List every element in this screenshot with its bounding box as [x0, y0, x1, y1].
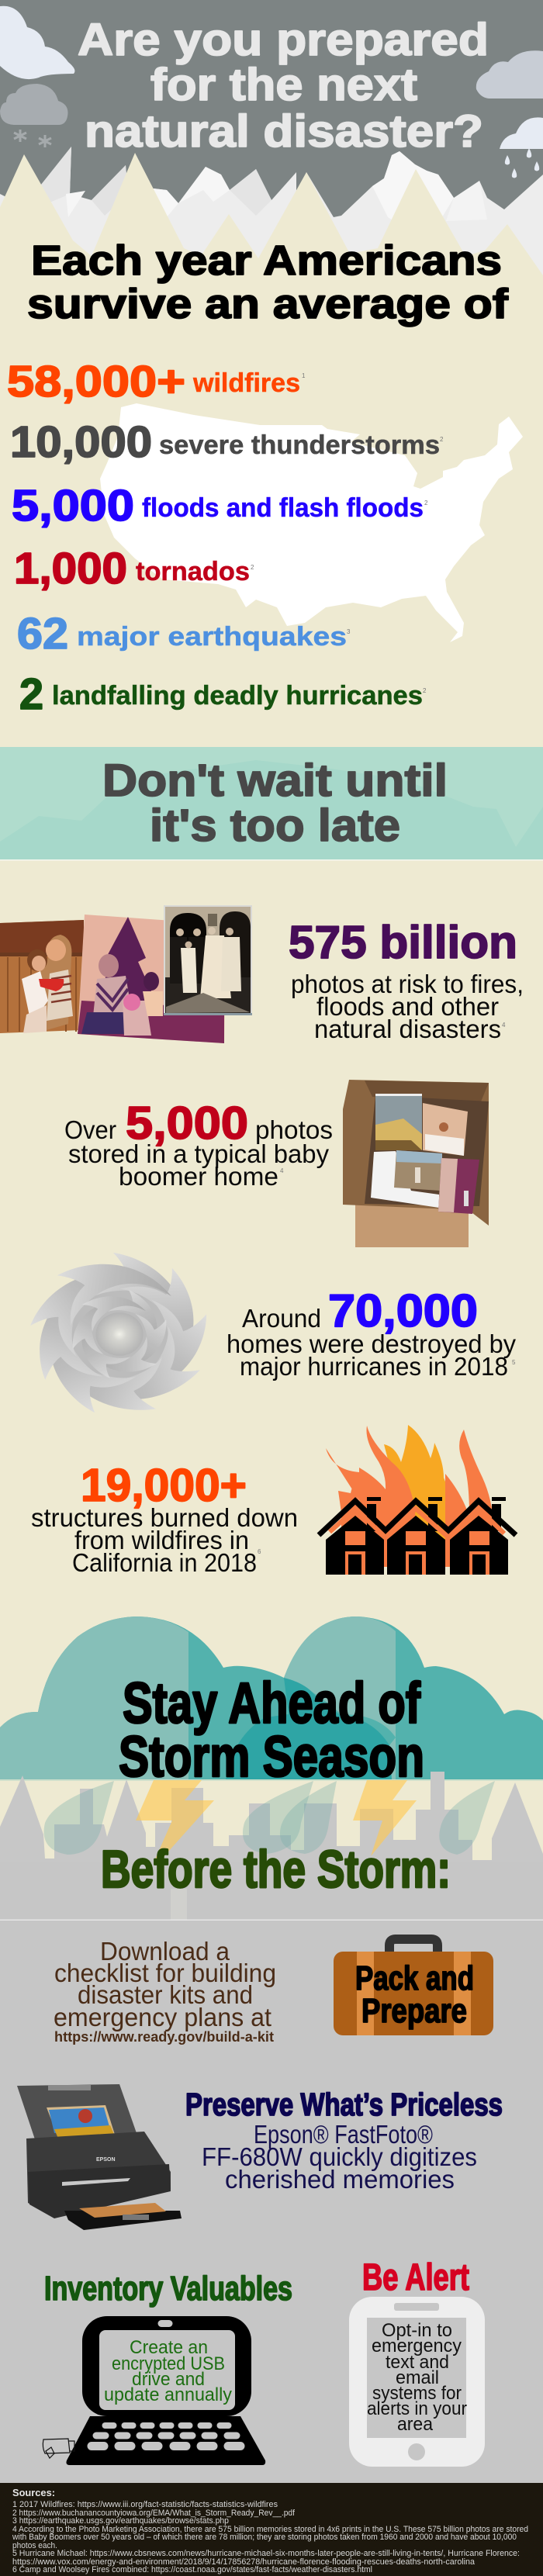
icon: hurricane swirl — [9, 1233, 228, 1432]
text: preserve what's priceless: Epson® FastFoto® — [254, 2120, 433, 2149]
laptop screen text: update annually — [104, 2384, 232, 2405]
stat: 19,000+ structures: 6 — [258, 1548, 261, 1555]
stat: earthquakes: 3 — [347, 628, 351, 635]
phone screen text: text and — [386, 2352, 449, 2373]
header sky — [0, 0, 543, 233]
stat: wildfires: wildfires — [192, 368, 300, 398]
sources list: 3 https://earthquake.usgs.gov/earthquakes/browse/stats.php — [12, 2516, 229, 2526]
laptop screen text: encrypted USB — [112, 2353, 225, 2374]
stat: thunderstorms: severe thunderstorms — [159, 430, 440, 460]
photo: purple print — [438, 1158, 479, 1214]
sources list: 5 Hurricane Michael: https://www.cbsnews.com/news/hurricane-michael-six-months-later-people-are-still-living-in-tents/, Hurricane Florence: — [12, 2549, 520, 2558]
stat: floods: floods and flash floods — [142, 493, 424, 523]
stat: tornados: 2 — [251, 564, 254, 571]
heading: each year Americans: Each year Americans — [31, 237, 502, 284]
icon: rain cloud — [500, 117, 543, 178]
stat: 575 billion photos: photos at risk to fires, — [291, 970, 524, 998]
title: for the next — [150, 60, 417, 110]
sources list: 2 https://www.buchanancountyiowa.org/EMA/What_is_Storm_Ready_Rev__.pdf — [12, 2509, 296, 2518]
icon: smartphone — [349, 2297, 485, 2467]
stat: hurricanes: 2 — [423, 687, 427, 694]
stat: 5,000 photos — [64, 1098, 333, 1191]
lightning bolts — [136, 1780, 417, 1873]
stat: 575 billion photos: 4 — [502, 1022, 506, 1029]
stat: 575 billion photos — [289, 917, 524, 1043]
sources list: photos each. — [12, 2541, 57, 2550]
text: preserve what's priceless: FF-680W quickly digitizes — [202, 2142, 477, 2171]
icon: grey cloud right — [476, 50, 543, 99]
phone screen text: systems for — [372, 2383, 462, 2404]
phone screen text: email — [396, 2367, 439, 2388]
stat: 5,000 photos: stored in a typical baby — [68, 1139, 329, 1168]
chimneys — [367, 1497, 506, 1531]
suitcase label: Pack and — [355, 1959, 474, 1997]
panel: preparation steps — [0, 1862, 543, 2483]
text: checklist: checklist for building — [54, 1959, 276, 1987]
icon: snow cloud — [0, 84, 68, 147]
stat: 19,000+ structures: California in 2018 — [72, 1548, 257, 1577]
suitcase label: Prepare — [361, 1992, 467, 2030]
panel: storm city — [0, 1772, 543, 1924]
flames — [326, 1425, 500, 1567]
stat: hurricanes: 2 — [19, 669, 43, 719]
stat: 575 billion photos: 575 billion — [289, 917, 517, 968]
snowy mountains — [0, 147, 543, 310]
photo: white print — [371, 1151, 439, 1208]
stat: 5,000 photos: 4 — [280, 1167, 284, 1174]
text: preserve what's priceless — [185, 2087, 503, 2194]
image: cardboard box of photos — [343, 1080, 489, 1247]
stat: hurricanes — [19, 669, 427, 719]
heading: be alert: Be Alert — [362, 2257, 469, 2298]
stat: hurricanes: landfalling deadly hurricanes — [52, 681, 423, 711]
stat: wildfires: 58,000+ — [7, 357, 185, 406]
stat: wildfires: 1 — [302, 372, 306, 379]
stat: 70,000 homes — [227, 1285, 516, 1381]
text: checklist — [54, 1937, 276, 2045]
panel: storm clouds — [0, 1616, 543, 1781]
photo: vintage wedding — [164, 905, 252, 1015]
stat: 575 billion photos: natural disasters — [314, 1015, 501, 1043]
sources heading: Sources: — [12, 2487, 55, 2498]
laptop screen text: drive and — [132, 2369, 205, 2390]
phone screen text: area — [397, 2414, 434, 2435]
icon: large white cloud — [0, 6, 74, 79]
stat: 19,000+ structures — [31, 1460, 298, 1577]
stat: thunderstorms: 10,000 — [10, 417, 152, 467]
phone screen text: emergency — [372, 2336, 462, 2356]
photo: yellow house — [375, 1094, 422, 1150]
heading: each year Americans: survive an average of — [27, 281, 509, 327]
heading: inventory valuables: Inventory Valuables — [44, 2270, 292, 2308]
heading: stay ahead — [119, 1671, 424, 1789]
icon: suitcase — [334, 1939, 493, 2035]
image: stacked family photos — [0, 905, 252, 1043]
panel: sources footer — [0, 2483, 543, 2576]
title — [78, 15, 489, 157]
stat: 19,000+ structures: structures burned down — [31, 1503, 298, 1532]
rain drops — [44, 1781, 495, 1855]
image: photo scanner: EPSON — [96, 2157, 116, 2163]
text: checklist: https://www.ready.gov/build-a-kit — [54, 2029, 274, 2045]
laptop screen text: Create an — [130, 2337, 208, 2358]
cream peaks — [0, 153, 543, 326]
stat: floods: 5,000 — [12, 481, 134, 531]
text: checklist: emergency plans at — [54, 2003, 272, 2031]
image: photo scanner — [17, 2084, 182, 2230]
text: preserve what's priceless: cherished memories — [225, 2165, 455, 2194]
stat: 70,000 homes: major hurricanes in 2018 — [240, 1352, 508, 1381]
stat: 575 billion photos: floods and other — [316, 992, 499, 1021]
stat: tornados: tornados — [136, 557, 250, 586]
stat: floods — [12, 481, 428, 531]
panel: don't wait band — [0, 747, 543, 861]
stat: 5,000 photos: 5,000 — [126, 1098, 248, 1149]
sources list — [12, 2500, 528, 2574]
phone screen text: alerts in your — [367, 2398, 467, 2419]
stat: tornados — [14, 544, 254, 593]
heading: don't wait: Don't wait until — [102, 756, 448, 806]
skyline — [0, 1772, 543, 1924]
stat: 70,000 homes: 70,000 — [328, 1285, 478, 1336]
stat: earthquakes: major earthquakes — [77, 622, 347, 652]
stat: 70,000 homes: 5 — [512, 1359, 516, 1366]
header panel — [0, 0, 543, 326]
photo: baby in crib — [423, 1103, 468, 1156]
heading: stay ahead: Stay Ahead of — [123, 1671, 420, 1735]
sources list: 1 2017 Wildfires: https://www.iii.org/fact-statistic/facts-statistics-wildfires — [12, 2500, 278, 2509]
stat: 19,000+ structures: 19,000+ — [81, 1460, 247, 1511]
sources list: 6 Camp and Woolsey Fires combined: https://coast.noaa.gov/states/fast-facts/weather-disasters.html — [12, 2565, 372, 2574]
title: natural disaster? — [85, 106, 483, 157]
stat: thunderstorms: 2 — [440, 436, 444, 443]
title: Are you prepared — [78, 15, 489, 65]
heading: stay ahead: Storm Season — [119, 1724, 424, 1789]
keyboard keys — [87, 2422, 245, 2450]
phone screen text — [367, 2320, 467, 2435]
stat: 70,000 homes: homes were destroyed by — [227, 1329, 516, 1358]
icon: burning houses — [319, 1425, 516, 1575]
stat: 70,000 homes: Around — [242, 1304, 321, 1333]
photo: christmas tree — [78, 915, 226, 1043]
photo: person on road — [394, 1150, 442, 1191]
stat: 19,000+ structures: from wildfires in — [74, 1526, 249, 1554]
stat: 5,000 photos: Over — [64, 1115, 116, 1144]
heading: don't wait — [102, 756, 448, 851]
stat: thunderstorms — [10, 417, 444, 467]
text: checklist: disaster kits and — [78, 1980, 253, 2009]
stat: earthquakes: 62 — [17, 609, 68, 659]
suitcase label — [355, 1959, 474, 2030]
stat: wildfires — [7, 357, 306, 406]
stat: 5,000 photos: boomer home — [119, 1162, 278, 1191]
heading: each year Americans — [27, 237, 509, 327]
USB drive — [43, 2439, 74, 2458]
heading: don't wait: it's too late — [150, 800, 400, 851]
stat: floods: 2 — [424, 500, 428, 507]
map: United States silhouette — [100, 403, 523, 642]
stat: earthquakes — [17, 609, 351, 659]
sources list: with Baby Boomers over 50 years old – of which there are 78 million; they are storing photos taken from 1960 and 2000 and have about 10,000 — [12, 2533, 517, 2542]
laptop screen text — [104, 2337, 232, 2405]
houses — [319, 1501, 516, 1575]
phone screen text: Opt-in to — [382, 2320, 452, 2341]
stat: 5,000 photos: photos — [255, 1115, 333, 1144]
heading: before the storm: Before the Storm: — [101, 1840, 451, 1899]
stat: tornados: 1,000 — [14, 544, 127, 593]
icon: laptop with USB drive — [43, 2316, 265, 2465]
photo: mother and child — [0, 920, 84, 1033]
text: checklist: Download a — [100, 1937, 230, 1966]
sources list: https://www.vox.com/energy-and-environment/2018/9/14/17856278/hurricane-florence-flooding-rescues-deaths-north-carolina — [12, 2557, 476, 2567]
